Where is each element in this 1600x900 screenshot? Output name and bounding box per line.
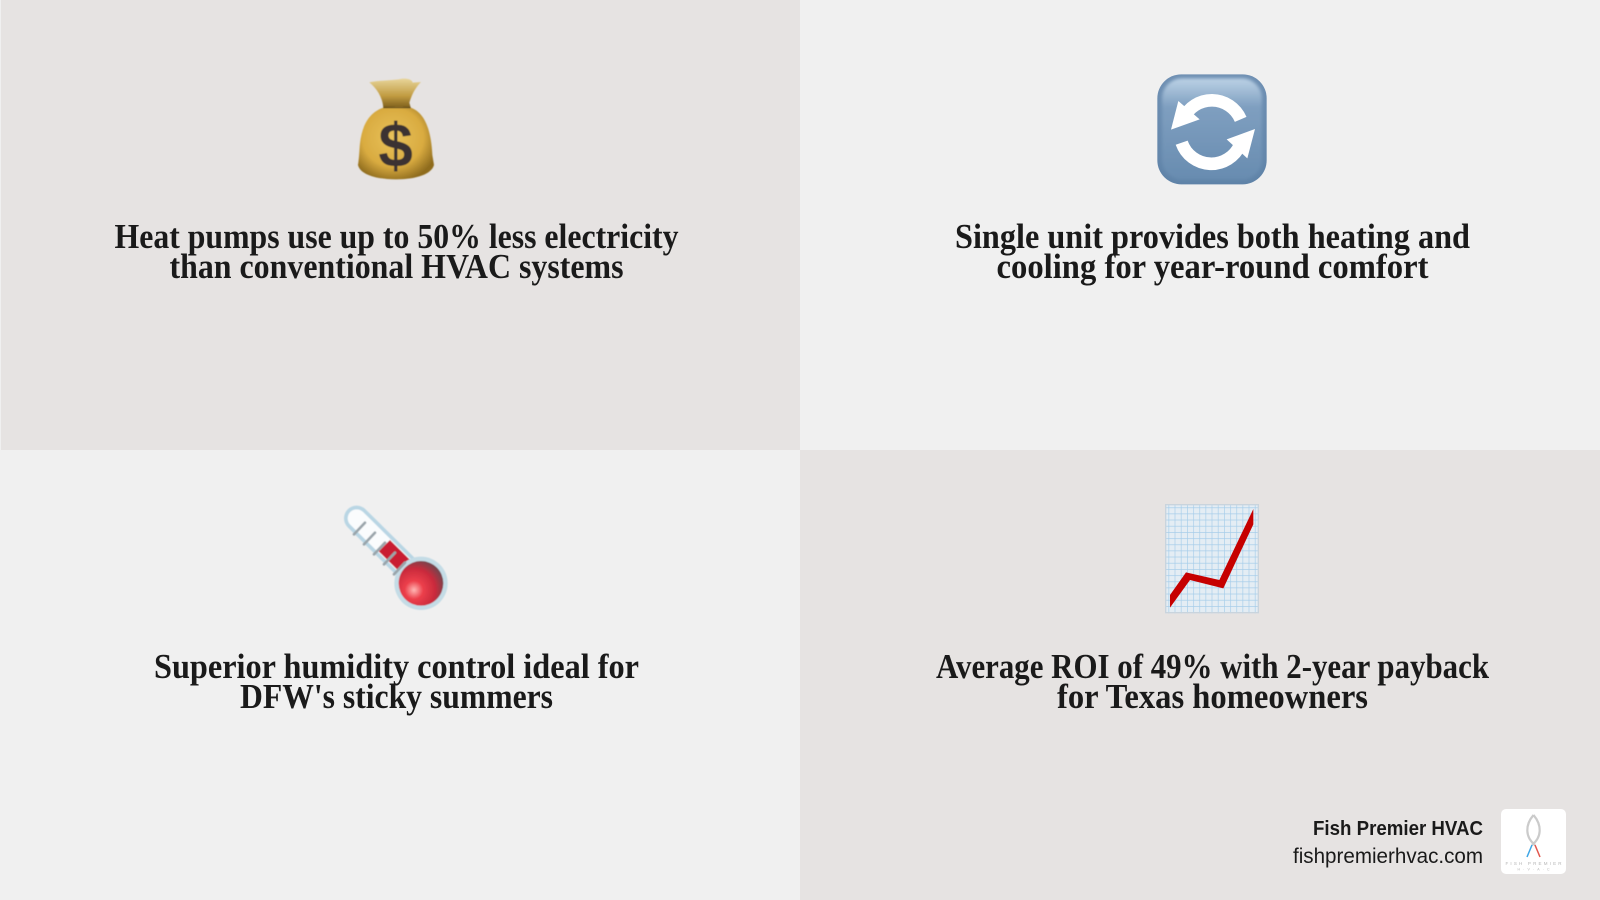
logo: Fish Premier HVAC: H·V·A·C: [1518, 868, 1550, 872]
panel: humidity control: [0, 450, 800, 900]
heading: heating and cooling: cooling for year-round comfort: [996, 248, 1429, 286]
panel: return on investment: [800, 450, 1600, 900]
heading: humidity control: DFW's sticky summers: [240, 678, 553, 716]
heading: ROI and payback: Average ROI of 49% with 2-year payback: [936, 648, 1490, 686]
heading: heating and cooling: Single unit provides both heating and: [955, 218, 1470, 256]
heading: electricity savings: Heat pumps use up to 50% less electricity: [114, 218, 678, 256]
icon: money bag: [358, 79, 434, 181]
heading: humidity control: [154, 648, 639, 716]
heading: ROI and payback: [936, 648, 1490, 716]
logo: Fish Premier HVAC: [1501, 809, 1566, 874]
icon: thermometer: [354, 518, 448, 610]
icon: money bag: $: [378, 112, 413, 181]
heading: electricity savings: than conventional HVAC systems: [170, 248, 624, 286]
heading: ROI and payback: for Texas homeowners: [1057, 678, 1368, 716]
footer: brand name and website: Fish Premier HVAC: [1313, 818, 1483, 840]
heading: heating and cooling: [955, 218, 1470, 286]
heading: electricity savings: [114, 218, 678, 286]
logo: Fish Premier HVAC: FISH PREMIER: [1506, 861, 1562, 866]
footer: brand name and website: fishpremierhvac.com: [1293, 845, 1483, 868]
footer: brand name and website: [1293, 818, 1483, 868]
icon: refresh arrows: [1157, 74, 1267, 184]
panel: year-round comfort: [800, 0, 1600, 450]
heading: humidity control: Superior humidity control ideal for: [154, 648, 639, 686]
panel: energy savings: [0, 0, 800, 450]
icon: rising chart: [1165, 504, 1259, 613]
